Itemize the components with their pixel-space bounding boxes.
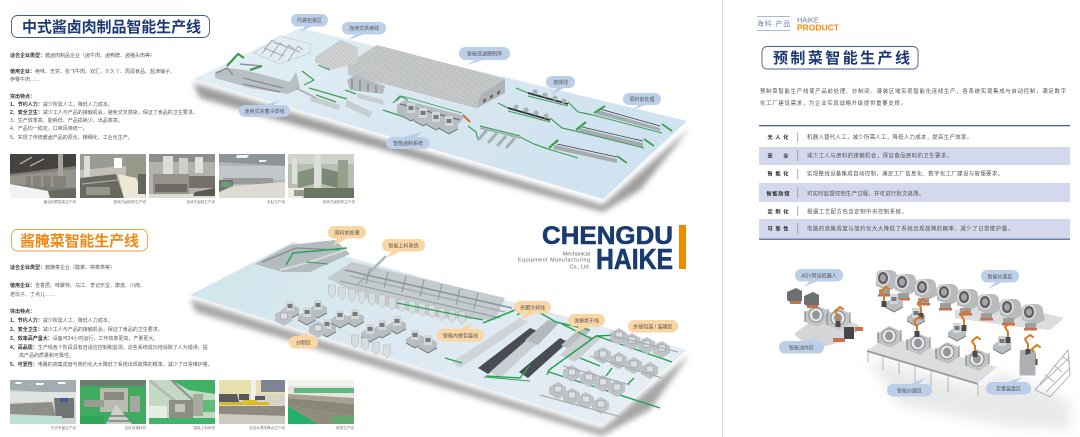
vegetable washer (479, 128, 520, 147)
label: bag washing and drying line (568, 314, 605, 334)
label: intelligent braising system: 智能卤制系统 (393, 140, 423, 147)
factory diagram: pickled vegetable line (190, 226, 690, 436)
green conveyors centre (302, 65, 450, 132)
label: outer bag packing area (628, 320, 678, 332)
photo: cooking line (10, 154, 76, 198)
label: inner bag packing area: 内袋包装区 (297, 17, 322, 24)
stir-frying machines (275, 300, 437, 358)
label: outer bag packing area: 外袋包装 / 装箱区 (633, 324, 673, 330)
label: sterile cooling line: 杀菌冷却线 (520, 304, 545, 312)
industrial robots (881, 287, 1040, 365)
platform floor (193, 28, 687, 199)
heading: pickled vegetables line title (12, 230, 148, 251)
photo captions: braised meat lines: 旋转式卤制机生产线 (114, 199, 146, 204)
photo captions: braised meat lines: 回转式卤制机生产线 (323, 199, 355, 204)
text block: braised meat line details (10, 52, 198, 141)
label: portioning area: 定量装盘区 (996, 386, 1021, 392)
text block: braised meat line details: 3、生产效率高、能耗低、产品损耗少、出品率高。 (10, 117, 123, 124)
label: intelligent feeding system (382, 239, 425, 258)
text block: braised meat line details: 5、实现了传统酱卤产品的原化、精细化、工业化生产。 (10, 134, 133, 141)
label: stir-frying area: 炒制区 (296, 340, 311, 346)
label: continuous baking line (342, 22, 386, 40)
photo row: pickled vegetable lines (10, 380, 354, 424)
heading: braised meat line title (12, 16, 210, 38)
raw material pre-treatment lines (548, 106, 672, 163)
feeding tanks & gantry (327, 256, 530, 325)
logo: Chengdu Haike: HAIKE (596, 244, 673, 276)
row: customised (768, 206, 907, 216)
row: unmanned (768, 132, 972, 142)
photo captions: braised meat lines: 酱油闷煮智能生产线 (44, 199, 76, 204)
text block: braised meat line details: 突出特点： (10, 93, 35, 100)
raw material area (255, 240, 350, 272)
text block: braised meat line details: 使用企业：绝味、无穷、张飞牛肉、双汇、久久丫、周润食品、盐津铺子、 (10, 68, 175, 75)
row: unmanned: 无人化 (768, 133, 789, 141)
text block: braised meat line details: 4、产品均一稳定，口味风味统一。 (10, 125, 88, 132)
photo: blanching line (288, 380, 354, 424)
label: AGV robot (795, 269, 843, 287)
label: raw material pre-treatment: 原料前处理 (629, 96, 655, 103)
photo: pasteurising line (10, 380, 76, 424)
text block: braised meat line details: 适合企业类型：酱卤肉制品企业（卤牛肉、卤鸭脖、卤猪头肉等） (10, 52, 155, 59)
photo: hall line (219, 154, 285, 198)
soft floor shadow (865, 357, 1070, 430)
photo captions: pickled vegetable lines: 巴氏杀菌生产线 (51, 425, 76, 430)
text block: pickled vegetables line details (10, 264, 213, 368)
left cooler line (215, 54, 300, 94)
logo: Chengdu Haike: Equipment Manufacturing (518, 258, 590, 264)
label: tumbling line (546, 76, 575, 95)
mid tanks and cylinders (296, 75, 385, 118)
large cold storage warehouse (348, 45, 505, 108)
label: sauce frying area (887, 378, 932, 396)
photo: continuous cooking line (149, 154, 215, 198)
label: fryer area: 智能油炸区 (789, 344, 814, 352)
row: reliability (759, 219, 1070, 238)
text block: pickled vegetables line details: 1、节约人力：减少所需人工，降低人力成本。 (10, 317, 113, 324)
photo: rotary cooker line (80, 154, 146, 198)
label: continuous sterile cooling line (239, 100, 290, 117)
text block: pickled vegetables line details: 3、效率高产量大：设备可24小时运行，工作效率更高，产量更大。 (10, 335, 158, 342)
label: stir-fry area (981, 270, 1019, 289)
platform shadow (190, 299, 690, 436)
portion filling frame (1020, 350, 1070, 397)
row: customised: 定制化 (768, 208, 789, 216)
label: raw material pre-treatment: 原料前处理 (334, 230, 360, 236)
heading: prepared dishes line title: 预制菜智能生产线 (773, 49, 910, 67)
text block: braised meat line details: 1、节约人力：减少所需人工，降低人力成本。 (10, 101, 113, 108)
text block: pickled vegetables line details: 老坛子、丁点儿…… (10, 291, 55, 298)
heading: prepared dishes line title (762, 46, 918, 69)
small storage block (315, 40, 358, 70)
sterilising and drying conveyors (445, 307, 601, 381)
row: safety (759, 147, 1070, 165)
label: sterile cooling line (514, 301, 551, 321)
intro paragraph: 化工厂建设需求，为企业实现战略升级提供重要支撑。 (760, 99, 906, 107)
logo: Chengdu Haike: Co., Ltd. (570, 264, 590, 270)
text block: braised meat line details: 伊赛牛肉…… (10, 76, 40, 83)
AGV robots (787, 288, 819, 308)
row: customised: 根据工艺配方包含定制中央控制系统。 (807, 208, 907, 216)
text block: pickled vegetables line details: 高产品的质量和可靠性。 (19, 352, 74, 359)
braising machines (396, 96, 470, 134)
logo: Chengdu Haike: Mechanical (563, 252, 590, 258)
platform floor (190, 242, 687, 425)
row: reliability: 可靠性 (768, 224, 788, 232)
photo: intelligent feeding system (149, 380, 215, 424)
photo captions: pickled vegetable lines: 全自动漂洗降水生产线 (249, 425, 285, 430)
fryer station (794, 305, 863, 350)
page header: Haike product: 海科·产品 (757, 19, 790, 28)
row: safety: 减少工人与原料的接触机会，保证食品原料的卫生要求。 (807, 152, 952, 160)
row: traceability (759, 183, 1070, 202)
packing stations (540, 328, 678, 418)
lower machine bodies (885, 294, 1034, 366)
equipment group (215, 36, 672, 163)
label: continuous sterile cooling line: 连续式杀菌冷却线 (244, 108, 285, 115)
green connector lines right (468, 88, 593, 149)
label: intelligent braising system (386, 131, 430, 149)
label: inner bag packing line: 智能内袋包装线 (443, 332, 478, 340)
label: portioning area (986, 377, 1031, 394)
label: raw material pre-treatment (328, 226, 366, 246)
label: bag washing and drying line: 洗袋烘干线 (574, 318, 599, 324)
label: raw material pre-treatment (623, 93, 661, 110)
label: low temp curing warehouse (459, 47, 510, 65)
label: continuous baking line: 连续式烘烤线 (349, 25, 379, 32)
heading: braised meat line title: 中式酱卤肉制品智能生产线 (22, 18, 201, 36)
label: fryer area (779, 335, 824, 354)
label: AGV robot: AGV转运机器人 (801, 272, 837, 280)
row: traceability: 智能防错 (766, 190, 790, 198)
row: traceability: 可实时监督控制生产过程，并可进行批次追溯。 (807, 190, 924, 198)
factory diagram: robotic kitchen (779, 269, 1070, 430)
photo captions: pickled vegetable lines (51, 425, 354, 430)
factory diagram: braised meat line (193, 14, 690, 212)
text block: pickled vegetables line details: 5、可靠性：电路的高集成度与简约化大大降低了系统出现故障的概率，减少了日常维护量。 (10, 361, 213, 368)
label: low temp curing warehouse: 智能低温腌制库 (467, 50, 502, 58)
pipe frames (254, 36, 311, 64)
photo captions: pickled vegetable lines: 智能上料系统 (193, 425, 215, 430)
logo: Chengdu Haike: CHENGDU (542, 222, 673, 250)
photo row: braised meat lines (10, 154, 354, 198)
text block: pickled vegetables line details: 2、安全卫生：减少工人与产品的接触机会，保证了食品的卫生要求。 (10, 326, 163, 333)
row: safety: 安全 (768, 152, 789, 160)
label: intelligent feeding system: 智能上料系统 (388, 242, 419, 250)
table: features (759, 125, 1070, 240)
label: inner bag packing area (291, 14, 328, 32)
logo: Chengdu Haike (518, 222, 686, 276)
row: reliability: 电路的高集成度与简约化大大降低了系统出现故障的概率，减少了日常维护量。 (807, 224, 1013, 232)
page header: Haike product (757, 16, 840, 32)
label: sauce frying area: 智能炒酱区 (897, 388, 922, 394)
label: stir-fry area: 智能炒菜区 (987, 274, 1013, 280)
photo captions: braised meat lines: 毛肚生产线 (267, 199, 285, 204)
long back table (955, 302, 1064, 330)
intro paragraph (760, 87, 1066, 107)
row: intelligent (768, 169, 1003, 179)
left page divider (722, 0, 723, 437)
green packing pipework (547, 324, 672, 408)
label: tumbling line: 滚揉线 (553, 79, 568, 86)
intro paragraph: 预制菜智能生产线使产品前处理、炒制间、灌装区域实现智能化连线生产，各系统实现集成与自动控制，满足数字 (760, 87, 1066, 95)
photo captions: braised meat lines (44, 199, 355, 204)
text block: pickled vegetables line details: 4、高品质：生产线各个阶段具有自适应控制和监测，这些系统成功地消除了人为错误，提 (10, 344, 208, 351)
photo: rotary braising line (288, 154, 354, 198)
page header: Haike product: PRODUCT (797, 22, 840, 32)
photo captions: braised meat lines: 连续式卤制生产线 (186, 199, 215, 204)
row: intelligent: 智能化 (768, 170, 789, 178)
text block: pickled vegetables line details: 使用企业：吉香居、味聚特、乌江、李记乐宝、康逸、川南、 (10, 282, 145, 289)
row: intelligent: 实现整线设备集成自动控制，满足工厂信息化、数字化工厂建设与管理要求。 (807, 170, 1003, 178)
photo captions: pickled vegetable lines: 全自动灌料机 (124, 425, 146, 430)
stir-fry drums (876, 270, 1045, 330)
photo: automatic filling machine (80, 380, 146, 424)
front table (867, 326, 997, 396)
label: inner bag packing line (437, 322, 484, 342)
text block: braised meat line details: 2、安全卫生：减少工人与产品的接触机会，避免交叉感染，保证了食品的卫生要求。 (10, 109, 198, 116)
photo: rinse and drain line (219, 380, 285, 424)
photo captions: pickled vegetable lines: 焯烫生产线 (336, 425, 354, 430)
tumbler lines (508, 90, 568, 122)
platform shadow (193, 83, 690, 212)
row: unmanned: 机器人替代人工，减少所需人工，降低人力成本，提高生产效率。 (807, 133, 972, 141)
label: stir-frying area (289, 331, 318, 348)
text block: pickled vegetables line details: 突出特点： (10, 308, 35, 315)
equipment group (255, 240, 678, 418)
text block: pickled vegetables line details: 适合企业类型：酱腌菜企业（酸菜、榨菜类等） (10, 264, 115, 271)
heading: pickled vegetables line title: 酱腌菜智能生产线 (20, 232, 139, 250)
page header: Haike product: HAIKE (797, 16, 819, 24)
